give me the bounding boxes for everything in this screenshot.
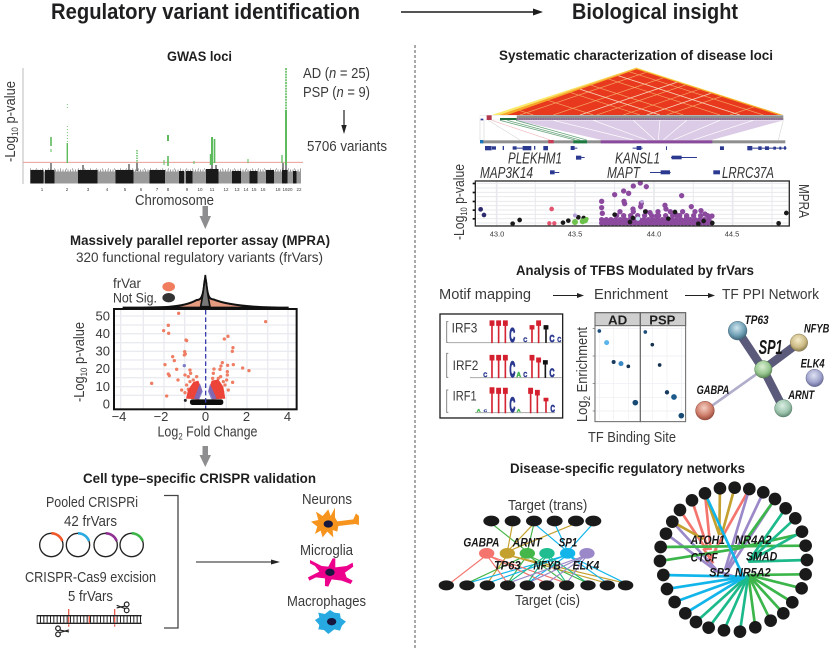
- scatter axes text: 10: [459, 207, 469, 216]
- motif logos panel: A: [517, 408, 521, 414]
- text: neurons: Neurons: [302, 492, 352, 508]
- volcano axes text: 50: [96, 308, 110, 324]
- text: CRISPR-Cas9 excision: 5 frVars: [68, 589, 113, 605]
- step labels and arrows: Enrichment: [594, 286, 669, 303]
- motif logos panel: C: [523, 338, 528, 344]
- volcano axes text: −4: [112, 409, 126, 424]
- MPRA locus scatter plot: [473, 180, 789, 226]
- Manhattan plot: 15: [251, 187, 257, 192]
- volcano axes text: 40: [96, 326, 110, 341]
- volcano axes text: Fold Change: [183, 424, 258, 440]
- Manhattan plot: 8: [167, 187, 170, 192]
- Manhattan plot: 6: [140, 187, 143, 192]
- motif logos panel: T: [544, 320, 548, 347]
- axis label: -log10 p-value: p-value: [3, 81, 19, 127]
- volcano axes text: 0: [202, 409, 209, 424]
- volcano axes text: 2: [178, 432, 183, 442]
- motif logos panel: T: [503, 383, 508, 420]
- motif logos panel: T: [543, 355, 548, 382]
- TF PPI network: ELK4: [801, 356, 825, 370]
- legend: frVar and not sig: Not Sig.: [113, 290, 157, 306]
- text: pooled CRISPRi: Pooled CRISPRi: [46, 495, 138, 511]
- volcano axes text: −2: [154, 409, 168, 424]
- TF PPI network: SP1: [759, 337, 783, 359]
- axis label: chromosome: Chromosome: [135, 192, 214, 209]
- text: AD and PSP counts: AD (n = 25): [303, 66, 370, 82]
- icon: macrophage cell: [315, 610, 346, 634]
- circular regulatory network: SMAD: [746, 550, 777, 564]
- motif logos panel: T: [528, 383, 533, 420]
- enrichment axis labels: Log: [575, 398, 591, 422]
- motif logos panel: T: [496, 349, 501, 384]
- bipartite TF target network: ARNT: [512, 535, 543, 549]
- motif logos panel: T: [490, 382, 494, 420]
- text: AD and PSP counts: [303, 66, 370, 101]
- panel: MPRA: [70, 233, 330, 442]
- motif logos panel: C: [509, 325, 515, 347]
- LD heatmap: [492, 68, 783, 115]
- Manhattan plot: 5: [124, 187, 127, 192]
- gene labels: MAP3K14: [480, 165, 533, 182]
- step labels and arrows: Motif mapping: [439, 286, 531, 303]
- heading: MPRA: Massively parallel reporter assay (MPRA): [70, 233, 330, 248]
- motif logos panel: [440, 314, 563, 420]
- legend: frVar and not sig: frVar: [113, 275, 141, 291]
- circular regulatory network: NR5A2: [735, 565, 771, 579]
- bipartite TF target network: SP1: [559, 535, 577, 549]
- bipartite TF target network: NFYB: [533, 558, 561, 572]
- Manhattan plot: 12: [223, 187, 229, 192]
- text: macrophages: Macrophages: [287, 594, 366, 610]
- Manhattan plot: 2: [66, 187, 69, 192]
- text: pooled CRISPRi: [46, 495, 138, 530]
- scatter axes text: -Log: [452, 211, 468, 240]
- scatter axes text: 43.5: [568, 230, 582, 238]
- motif logos panel: C: [523, 371, 528, 379]
- Manhattan plot: 16: [260, 187, 266, 192]
- Manhattan plot: 13: [234, 187, 240, 192]
- text: microglia: Microglia: [300, 543, 354, 559]
- motif logos panel: T: [496, 383, 501, 420]
- bipartite TF target network: ELK4: [573, 558, 599, 572]
- motif logos panel: A: [477, 408, 481, 414]
- heading: systematic characterization: Systematic characterization of disease loci: [499, 48, 773, 63]
- scatter axes text: 43.0: [490, 230, 504, 238]
- motif logos panel: IRF1: [453, 388, 477, 404]
- arrow: GWAS to MPRA: [200, 206, 211, 229]
- gene bars and connecting fan: [480, 115, 785, 143]
- motif logos panel: T: [544, 395, 548, 417]
- volcano axes text: -Log: [72, 373, 88, 402]
- heading: regulatory networks: Disease-specific regulatory networks: [510, 461, 745, 476]
- TF PPI network: TP63: [745, 313, 769, 327]
- volcano axes text: 0: [103, 396, 110, 412]
- icon: DNA with cuts and scissors: [37, 602, 142, 637]
- motif logos panel: C: [550, 402, 555, 414]
- circular regulatory network: CTCF: [691, 551, 718, 565]
- gene labels: PLEKHM1: [508, 150, 562, 168]
- volcano axes text: 10: [79, 368, 89, 376]
- panel: regulatory networks: [439, 461, 813, 638]
- panel: GWAS loci: [3, 49, 387, 209]
- bipartite TF target network: Target (cis): [515, 593, 580, 609]
- motif logos panel: C: [549, 367, 555, 381]
- Manhattan plot: 4: [106, 187, 109, 192]
- enrichment axis labels: 2: [582, 396, 592, 400]
- motif logos panel: C: [509, 357, 515, 382]
- motif logos panel: T: [536, 316, 541, 349]
- Manhattan plot: 3: [87, 187, 90, 192]
- icon: neuron cell: [311, 508, 359, 537]
- enrichment axis labels: TF Binding Site: [588, 430, 676, 446]
- bipartite TF target network: TP63: [494, 558, 521, 572]
- arrow: to variants: [341, 110, 347, 134]
- Manhattan plot: 7: [156, 187, 159, 192]
- scatter axes text: 44.0: [647, 230, 661, 238]
- bracket: [164, 496, 178, 628]
- volcano axes text: 2: [243, 409, 250, 424]
- volcano plot: [114, 309, 297, 409]
- volcano axes text: [72, 308, 291, 442]
- motif logos panel: C: [509, 393, 515, 417]
- enrichment dot plot: PSP: [649, 313, 675, 328]
- Manhattan plot: 11: [210, 187, 215, 192]
- scatter axes text: [452, 164, 811, 240]
- motif logos panel: IRF3: [452, 320, 478, 336]
- Manhattan plot: [23, 68, 303, 192]
- enrichment axis labels: Enrichment: [575, 327, 591, 396]
- motif logos panel: T: [490, 349, 494, 384]
- motif logos panel: A: [516, 372, 521, 379]
- text: pooled CRISPRi: 42 frVars: [64, 514, 117, 530]
- gene labels: MAPT: [607, 165, 641, 182]
- motif logos panel: T: [530, 349, 534, 384]
- legend: frVar and not sig: [113, 275, 175, 306]
- gene labels: KANSL1: [615, 150, 660, 168]
- arrow: MPRA to CRISPR: [200, 446, 211, 467]
- axis label: -log10 p-value: -Log: [3, 133, 19, 162]
- circular regulatory network: [654, 481, 813, 638]
- text: CRISPR-Cas9 excision: CRISPR-Cas9 excision: [25, 570, 156, 586]
- motif logos panel: T: [503, 315, 508, 349]
- Manhattan plot: 10: [197, 187, 203, 192]
- panel: systematic characterization: [453, 50, 809, 240]
- icon: plasmids: [40, 533, 143, 557]
- axis label: -log10 p-value: 10: [10, 127, 20, 136]
- heading: CRISPR: Cell type–specific CRISPR validation: [83, 471, 316, 486]
- motif logos panel: C: [557, 336, 562, 344]
- motif logos panel: T: [530, 320, 534, 347]
- motif logos panel: T: [490, 316, 494, 349]
- volcano axes text: Log: [158, 424, 182, 440]
- motif logos panel: T: [503, 349, 508, 384]
- scatter axes text: p-value: [452, 164, 468, 207]
- TF PPI network: GABPA: [697, 383, 729, 397]
- arrow: identification to insight: [401, 8, 543, 16]
- Manhattan plot: 19: [282, 187, 288, 192]
- enrichment axis labels: [575, 327, 676, 446]
- enrichment dot plot: AD: [608, 313, 628, 328]
- volcano axes text: p-value: [72, 322, 88, 368]
- panel: CRISPR validation: [25, 471, 366, 637]
- circular regulatory network: NR4A2: [735, 533, 772, 547]
- motif logos panel: T: [535, 384, 540, 419]
- motif logos panel: T: [536, 354, 541, 384]
- gene labels: LRRC37A: [722, 165, 774, 182]
- volcano axes text: 4: [284, 409, 291, 424]
- text: AD and PSP counts: PSP (n = 9): [303, 85, 370, 101]
- circular regulatory network: ATOH1: [690, 533, 725, 547]
- gene tracks: [485, 146, 787, 174]
- motif logos panel: C: [549, 333, 555, 344]
- gene labels: [480, 150, 774, 182]
- bipartite TF target network: GABPA: [463, 535, 499, 549]
- Manhattan plot: 1: [41, 187, 44, 192]
- density curve: [123, 275, 289, 308]
- TF PPI network: [696, 313, 830, 420]
- enrichment dot plot: [593, 313, 686, 422]
- volcano axes text: 20: [96, 361, 110, 376]
- motif logos panel: C: [484, 408, 488, 413]
- arrow: to cell types: [196, 560, 280, 564]
- motif logos panel: T: [496, 315, 501, 349]
- Manhattan plot: 9: [186, 187, 189, 192]
- panel: TFBS analysis: [439, 263, 830, 446]
- motif logos panel: IRF2: [453, 357, 479, 373]
- subheading: frVars: 320 functional regulatory variants (frVars): [76, 249, 323, 265]
- icon: microglia cell: [308, 558, 353, 587]
- Manhattan plot: 22: [296, 187, 302, 192]
- Manhattan plot: 18: [275, 187, 281, 192]
- Manhattan plot: 14: [243, 187, 249, 192]
- volcano axes text: 30: [96, 344, 110, 358]
- volcano axes text: 10: [96, 379, 110, 394]
- scatter axes text: MPRA: [795, 184, 811, 218]
- motif logos panel: C: [483, 373, 488, 379]
- Manhattan plot: 20: [287, 187, 293, 192]
- scatter axes text: 44.5: [725, 230, 739, 238]
- bipartite TF target network: Target (trans): [508, 498, 587, 514]
- heading: GWAS loci: GWAS loci: [167, 49, 232, 64]
- heading: TFBS analysis: Analysis of TFBS Modulated by frVars: [516, 263, 754, 278]
- circular regulatory network: SP2: [709, 565, 730, 579]
- TF PPI network: ARNT: [788, 388, 816, 402]
- text: CRISPR-Cas9 excision: [25, 570, 156, 605]
- step labels and arrows: [439, 286, 819, 303]
- step labels and arrows: TF PPI Network: [722, 286, 819, 303]
- bipartite TF target network: [439, 498, 633, 609]
- text: 5706 variants: 5706 variants: [307, 139, 387, 155]
